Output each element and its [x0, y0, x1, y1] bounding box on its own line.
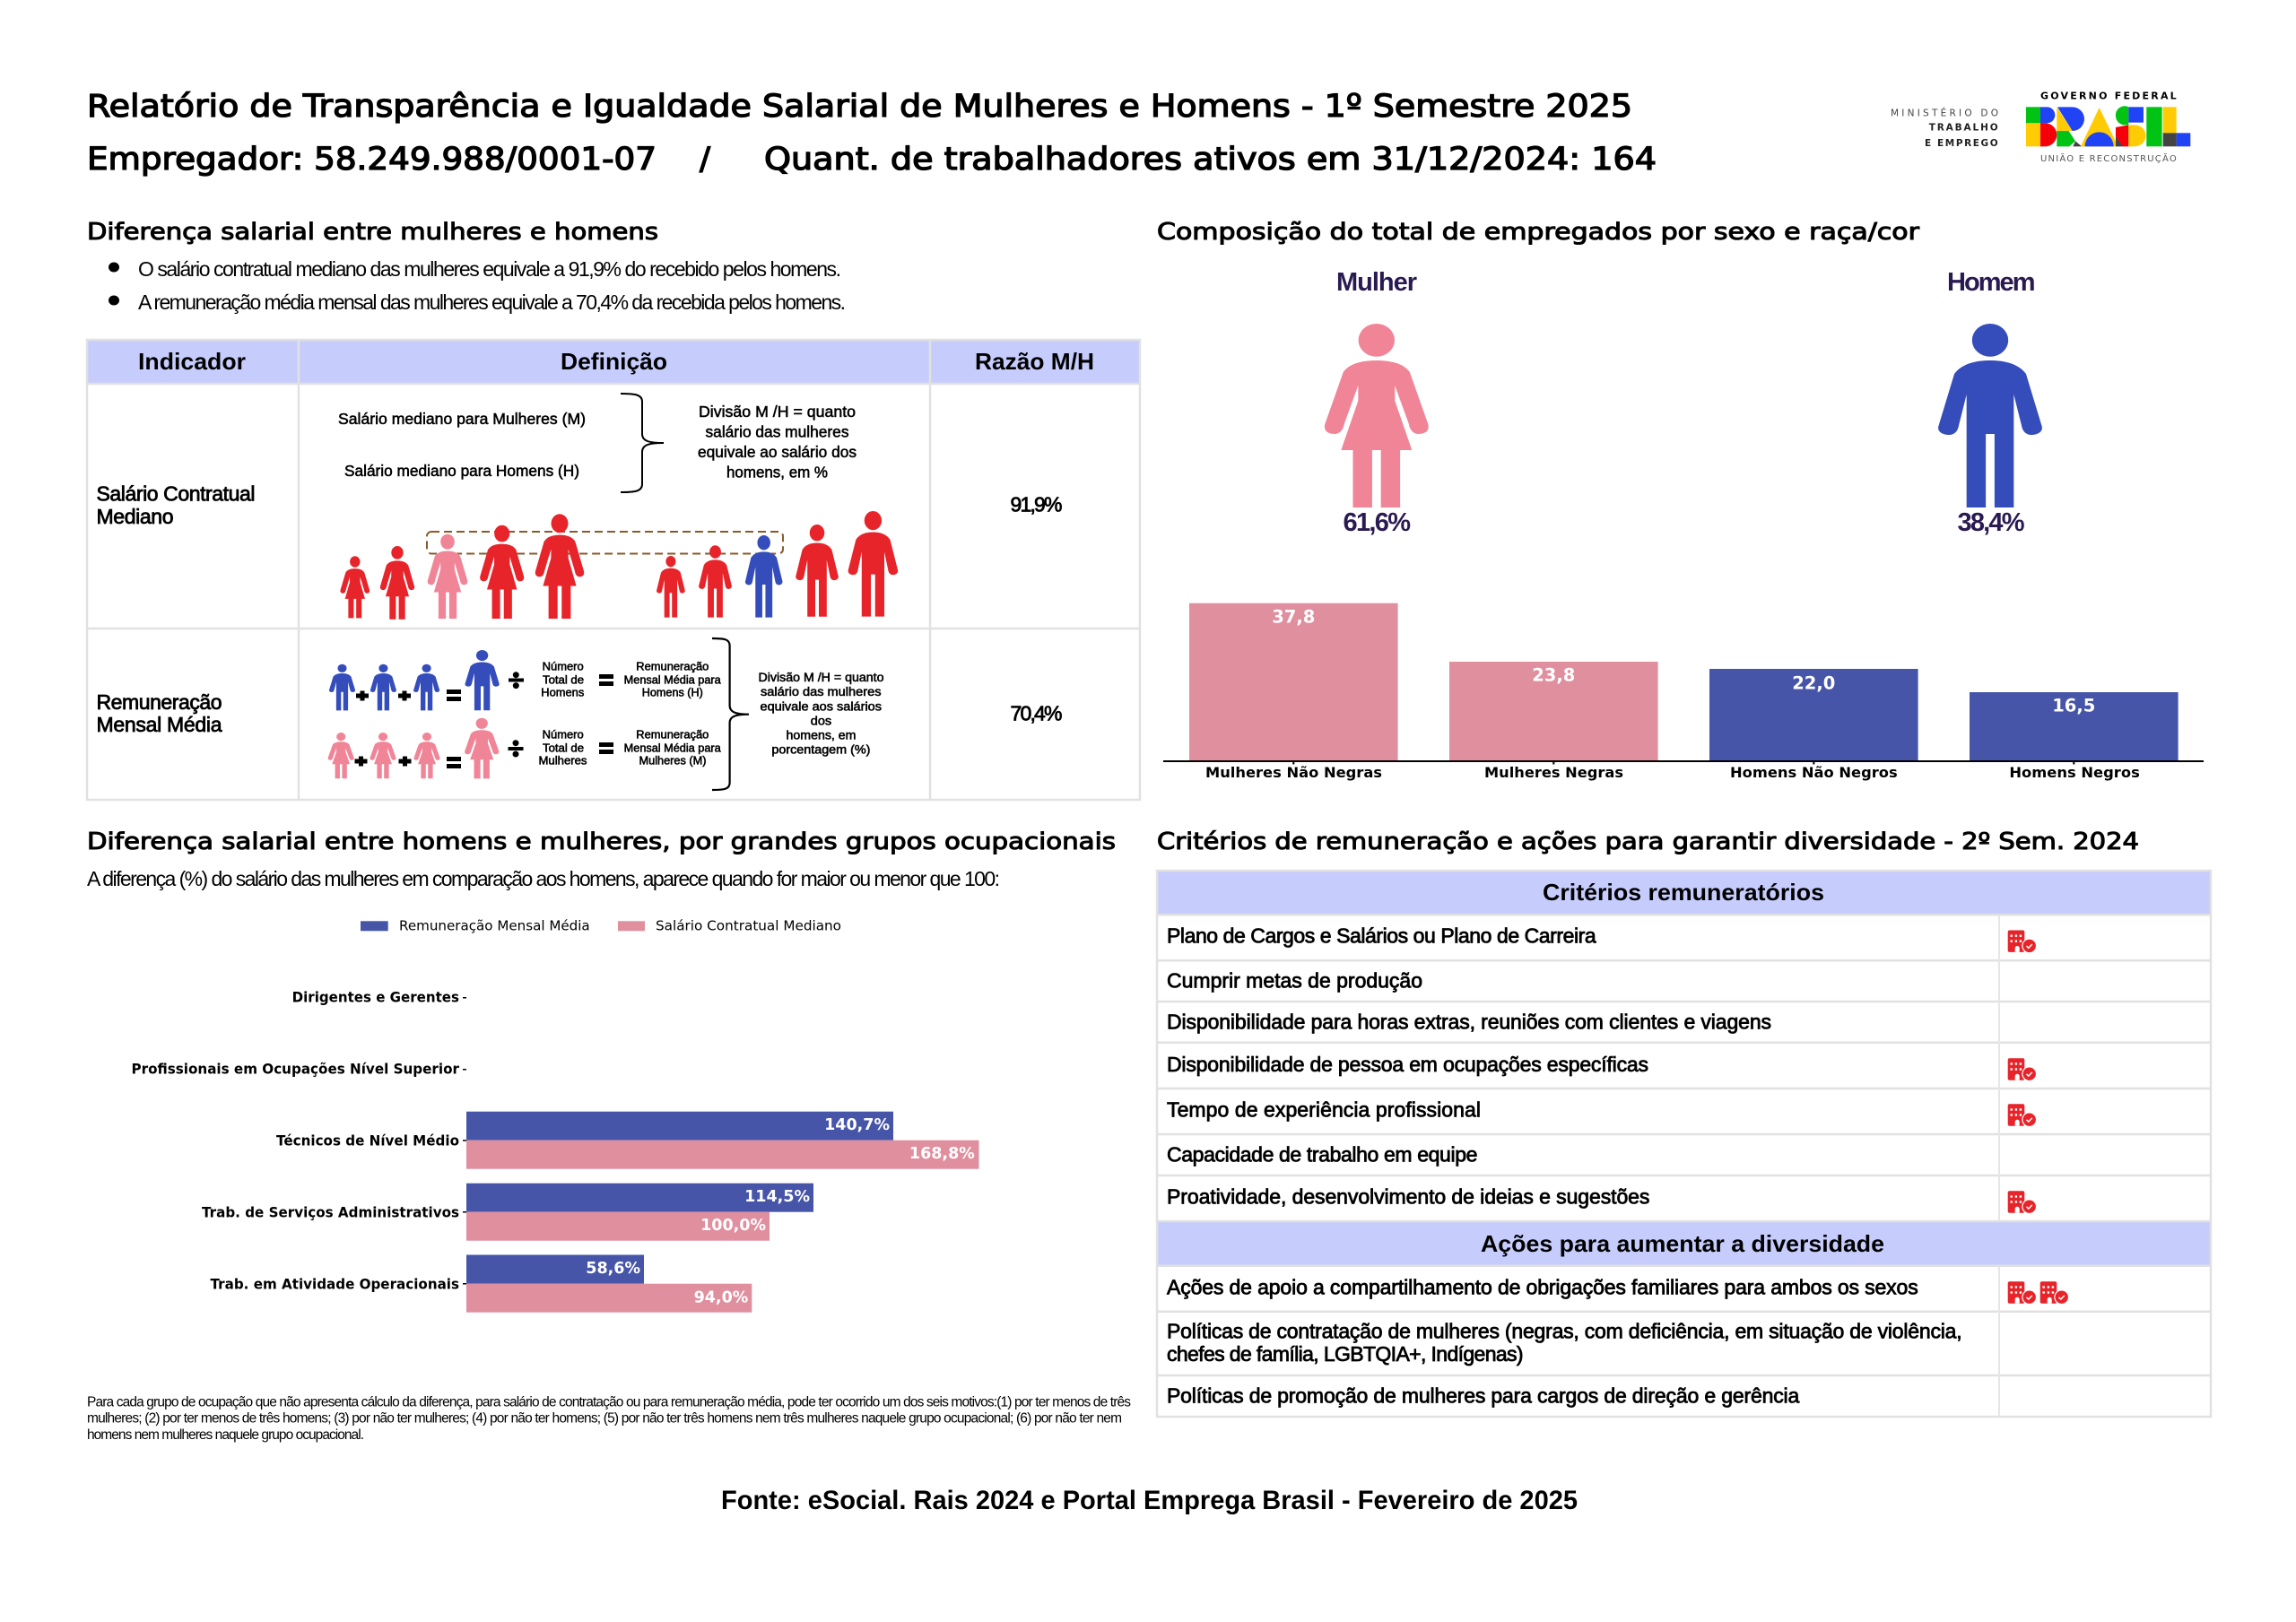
table rows text: Proatividade, desenvolvimento de ideias e sugestões	[1167, 1185, 1649, 1209]
definition: average pay text: Homens	[541, 687, 584, 699]
definition: average pay text: Remuneração	[636, 661, 709, 673]
heading: grupos ocupacionais: Diferença salarial entre homens e mulheres, por grandes grupos ocupacionais	[87, 828, 1116, 855]
bar chart: occupational groups: 94,0%	[694, 1288, 748, 1306]
table rows text: Disponibilidade para horas extras, reuniões com clientes e viagens	[1167, 1010, 1771, 1033]
panel: criteria table	[1157, 871, 2211, 1417]
bar chart: occupational groups: 140,7%	[824, 1116, 890, 1134]
bar chart: occupational groups: 58,6%	[586, 1260, 640, 1278]
bar chart: sex and race composition: 37,8	[1272, 606, 1315, 627]
definition: average pay text: Homens (H)	[642, 687, 703, 699]
definition: average pay text: salário das mulheres	[761, 685, 882, 698]
definition: median salary text: Divisão M /H = quanto	[699, 403, 856, 421]
definition: median salary text: salário das mulheres	[705, 423, 849, 441]
title: Relatório de Transparência e Igualdade Salarial de Mulheres e Homens - 1º Semestre 2025	[87, 89, 1632, 125]
title: Empregador: 58.249.988/0001-07	[87, 142, 657, 178]
legend: Salário Contratual Mediano	[656, 918, 841, 934]
bar chart: occupational groups	[131, 988, 979, 1313]
logo: ministry and government: GOVERNO FEDERAL	[2040, 91, 2177, 102]
bar chart: sex and race composition: 23,8	[1532, 665, 1575, 686]
definition: average pay text: Mulheres	[538, 755, 587, 768]
bullet list	[109, 257, 846, 314]
definition: average pay text: Total de	[543, 742, 584, 754]
bar chart: occupational groups: Trab. de Serviços Administrativos	[202, 1203, 459, 1221]
bar chart: occupational groups: 114,5%	[744, 1188, 810, 1206]
footnote: homens nem mulheres naquele grupo ocupacional.	[87, 1427, 364, 1443]
panel: woman share: Mulher	[1336, 268, 1417, 297]
table rows text	[1167, 924, 1962, 1407]
table rows text: Plano de Cargos e Salários ou Plano de Carreira	[1167, 924, 1596, 948]
section header: critérios remuneratórios: Critérios remuneratórios	[1543, 879, 1824, 906]
legend: Remuneração Mensal Média	[399, 918, 590, 934]
bar chart: sex and race composition: Mulheres Negras	[1484, 764, 1623, 781]
table rows text: Políticas de promoção de mulheres para cargos de direção e gerência	[1167, 1383, 1800, 1407]
table rows text: chefes de família, LGBTQIA+, Indígenas)	[1167, 1342, 1524, 1366]
logo: ministry and government: E EMPREGO	[1925, 138, 1998, 149]
table rows text: Disponibilidade de pessoa em ocupações específicas	[1167, 1053, 1648, 1076]
table header	[138, 348, 1094, 375]
heading: composição: Composição do total de empregados por sexo e raça/cor	[1157, 219, 1919, 246]
row label: salário contratual mediano	[97, 482, 255, 528]
table rows text: Políticas de contratação de mulheres (negras, com deficiência, em situação de violência,	[1167, 1320, 1962, 1343]
definition: median salary text: homens, em %	[726, 464, 828, 481]
title	[87, 89, 1657, 178]
table header: Definição	[561, 348, 667, 375]
logo: ministry and government: MINISTÉRIO DO	[1891, 107, 1998, 118]
footnote	[87, 1394, 1131, 1443]
row label: salário contratual mediano: Mediano	[97, 505, 174, 528]
section header: ações: Ações para aumentar a diversidade	[1481, 1230, 1884, 1257]
definition: median salary text: equivale ao salário dos	[698, 443, 857, 461]
table header: Razão M/H	[975, 348, 1094, 375]
definition: average pay text: Mensal Média para	[624, 742, 721, 754]
panel: woman share	[1325, 268, 1429, 537]
definition: average pay text: Mensal Média para	[624, 673, 721, 686]
footnote: Para cada grupo de ocupação que não apresenta cálculo da diferença, para salário de contratação ou para remuneração média, pode ter ocorrido um dos seis motivos:(1) por ter menos de três	[87, 1394, 1131, 1409]
bar chart: occupational groups: 100,0%	[700, 1217, 766, 1235]
bar chart: sex and race composition: 16,5	[2052, 696, 2095, 716]
definition: average pay text: equivale aos salários	[761, 699, 882, 713]
panel: man share: 38,4%	[1957, 508, 2025, 537]
bar chart: sex and race composition: Homens Não Negros	[1730, 764, 1898, 781]
heading: diferença salarial: Diferença salarial entre mulheres e homens	[87, 219, 658, 246]
text: explanation: A diferença (%) do salário das mulheres em comparação aos homens, aparece quando for maior ou menor que 100:	[87, 867, 1000, 890]
title: /	[700, 142, 710, 178]
value: razão salário mediano: 91,9%	[1010, 493, 1062, 516]
bar chart: sex and race composition	[1163, 603, 2204, 781]
table rows text: Cumprir metas de produção	[1167, 969, 1422, 993]
definition: average pay text: Remuneração	[636, 729, 709, 742]
icons: average formula men	[329, 650, 613, 710]
definition: average pay text: homens, em	[786, 728, 856, 742]
title: Quant. de trabalhadores ativos em 31/12/2024: 164	[764, 142, 1657, 178]
row label: remuneração mensal média	[97, 690, 222, 736]
panel: indicator table	[87, 340, 1140, 800]
bullet list: A remuneração média mensal das mulheres equivale a 70,4% da recebida pelos homens.	[138, 291, 846, 314]
definition: average pay text: Divisão M /H = quanto	[759, 671, 884, 684]
bar chart: occupational groups: Trab. em Atividade Operacionais	[210, 1275, 459, 1293]
icons: average formula women	[328, 718, 613, 778]
panel: woman share: 61,6%	[1344, 508, 1411, 537]
bar chart: occupational groups: Técnicos de Nível Médio	[276, 1132, 459, 1149]
icons: median figures row	[340, 511, 898, 620]
icons: company building markers	[2008, 931, 2068, 1304]
footnote: mulheres; (2) por ter menos de três homens; (3) por não ter mulheres; (4) por não ter homens; (5) por não ter três homens nem três mulheres naquele grupo ocupacional; (6) por não ter nem	[87, 1411, 1122, 1427]
logo: ministry and government: UNIÃO E RECONSTRUÇÃO	[2040, 152, 2177, 164]
bar chart: occupational groups: Profissionais em Ocupações Nível Superior	[131, 1060, 459, 1077]
table rows text: Capacidade de trabalho em equipe	[1167, 1142, 1477, 1166]
panel: man share	[1938, 268, 2042, 537]
logo: ministry and government	[1891, 91, 2190, 164]
row label: remuneração mensal média: Remuneração	[97, 690, 222, 714]
table header: Indicador	[138, 348, 246, 375]
row label: remuneração mensal média: Mensal Média	[97, 713, 222, 736]
heading: critérios: Critérios de remuneração e ações para garantir diversidade - 2º Sem. 2024	[1157, 828, 2139, 855]
definition: median salary text: Salário mediano para Mulheres (M)	[338, 410, 586, 428]
bullet list: O salário contratual mediano das mulheres equivale a 91,9% do recebido pelos homens.	[138, 257, 841, 281]
definition: median salary text: Salário mediano para Homens (H)	[344, 462, 579, 480]
legend	[361, 918, 841, 934]
bar chart: sex and race composition: Homens Negros	[2009, 764, 2140, 781]
table rows text: Ações de apoio a compartilhamento de obrigações familiares para ambos os sexos	[1167, 1276, 1918, 1299]
value: razão remuneração média: 70,4%	[1010, 701, 1062, 724]
definition: average pay text: Total de	[543, 673, 584, 686]
bar chart: occupational groups: 168,8%	[909, 1145, 975, 1163]
logo: ministry and government: TRABALHO	[1929, 123, 1998, 134]
definition: average pay text: Número	[543, 661, 584, 673]
row label: salário contratual mediano: Salário Contratual	[97, 482, 255, 506]
definition: average pay text	[538, 638, 884, 790]
source line: Fonte: eSocial. Rais 2024 e Portal Emprega Brasil - Fevereiro de 2025	[721, 1486, 1578, 1515]
definition: median salary text	[338, 394, 857, 492]
bar chart: occupational groups: Dirigentes e Gerentes	[292, 988, 459, 1005]
panel: man share: Homem	[1947, 268, 2036, 297]
definition: average pay text: Número	[543, 729, 584, 742]
definition: average pay text: dos	[811, 714, 831, 727]
bar chart: sex and race composition: Mulheres Não Negras	[1205, 764, 1382, 781]
definition: average pay text: Mulheres (M)	[639, 755, 707, 768]
definition: average pay text: porcentagem (%)	[771, 742, 870, 756]
table rows text: Tempo de experiência profissional	[1167, 1098, 1481, 1122]
bar chart: sex and race composition: 22,0	[1792, 672, 1835, 693]
